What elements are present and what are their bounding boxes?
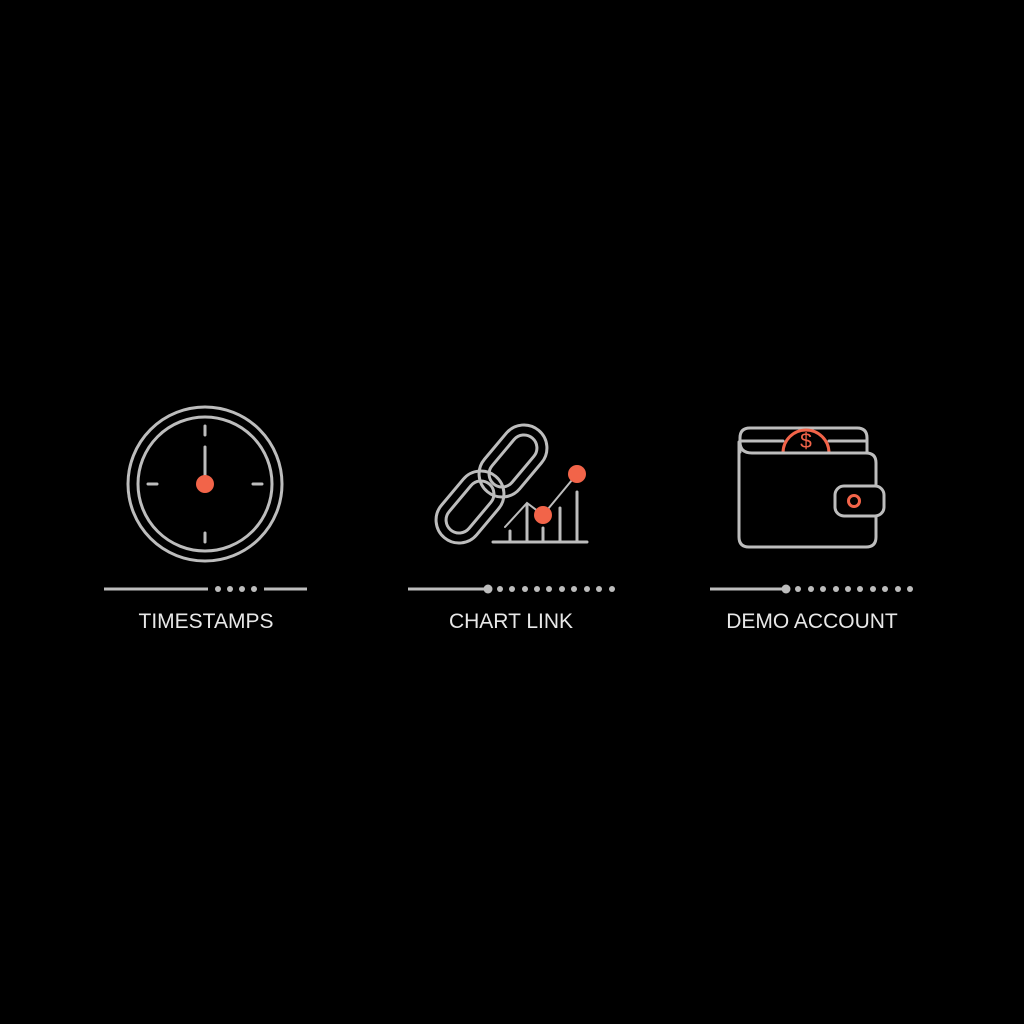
- timeline: chart link: [408, 584, 615, 594]
- timeline: timestamps: [104, 586, 307, 592]
- icon: wallet with coin: $: [800, 430, 812, 453]
- icon: clock: [128, 407, 282, 561]
- label: timestamps: TIMESTAMPS: [139, 610, 273, 633]
- timeline: demo account: [710, 584, 913, 594]
- icon: chain link with chart: [427, 416, 587, 552]
- icon: wallet with coin: [739, 428, 884, 547]
- label: chart link: CHART LINK: [449, 610, 573, 633]
- label: demo account: DEMO ACCOUNT: [726, 610, 898, 633]
